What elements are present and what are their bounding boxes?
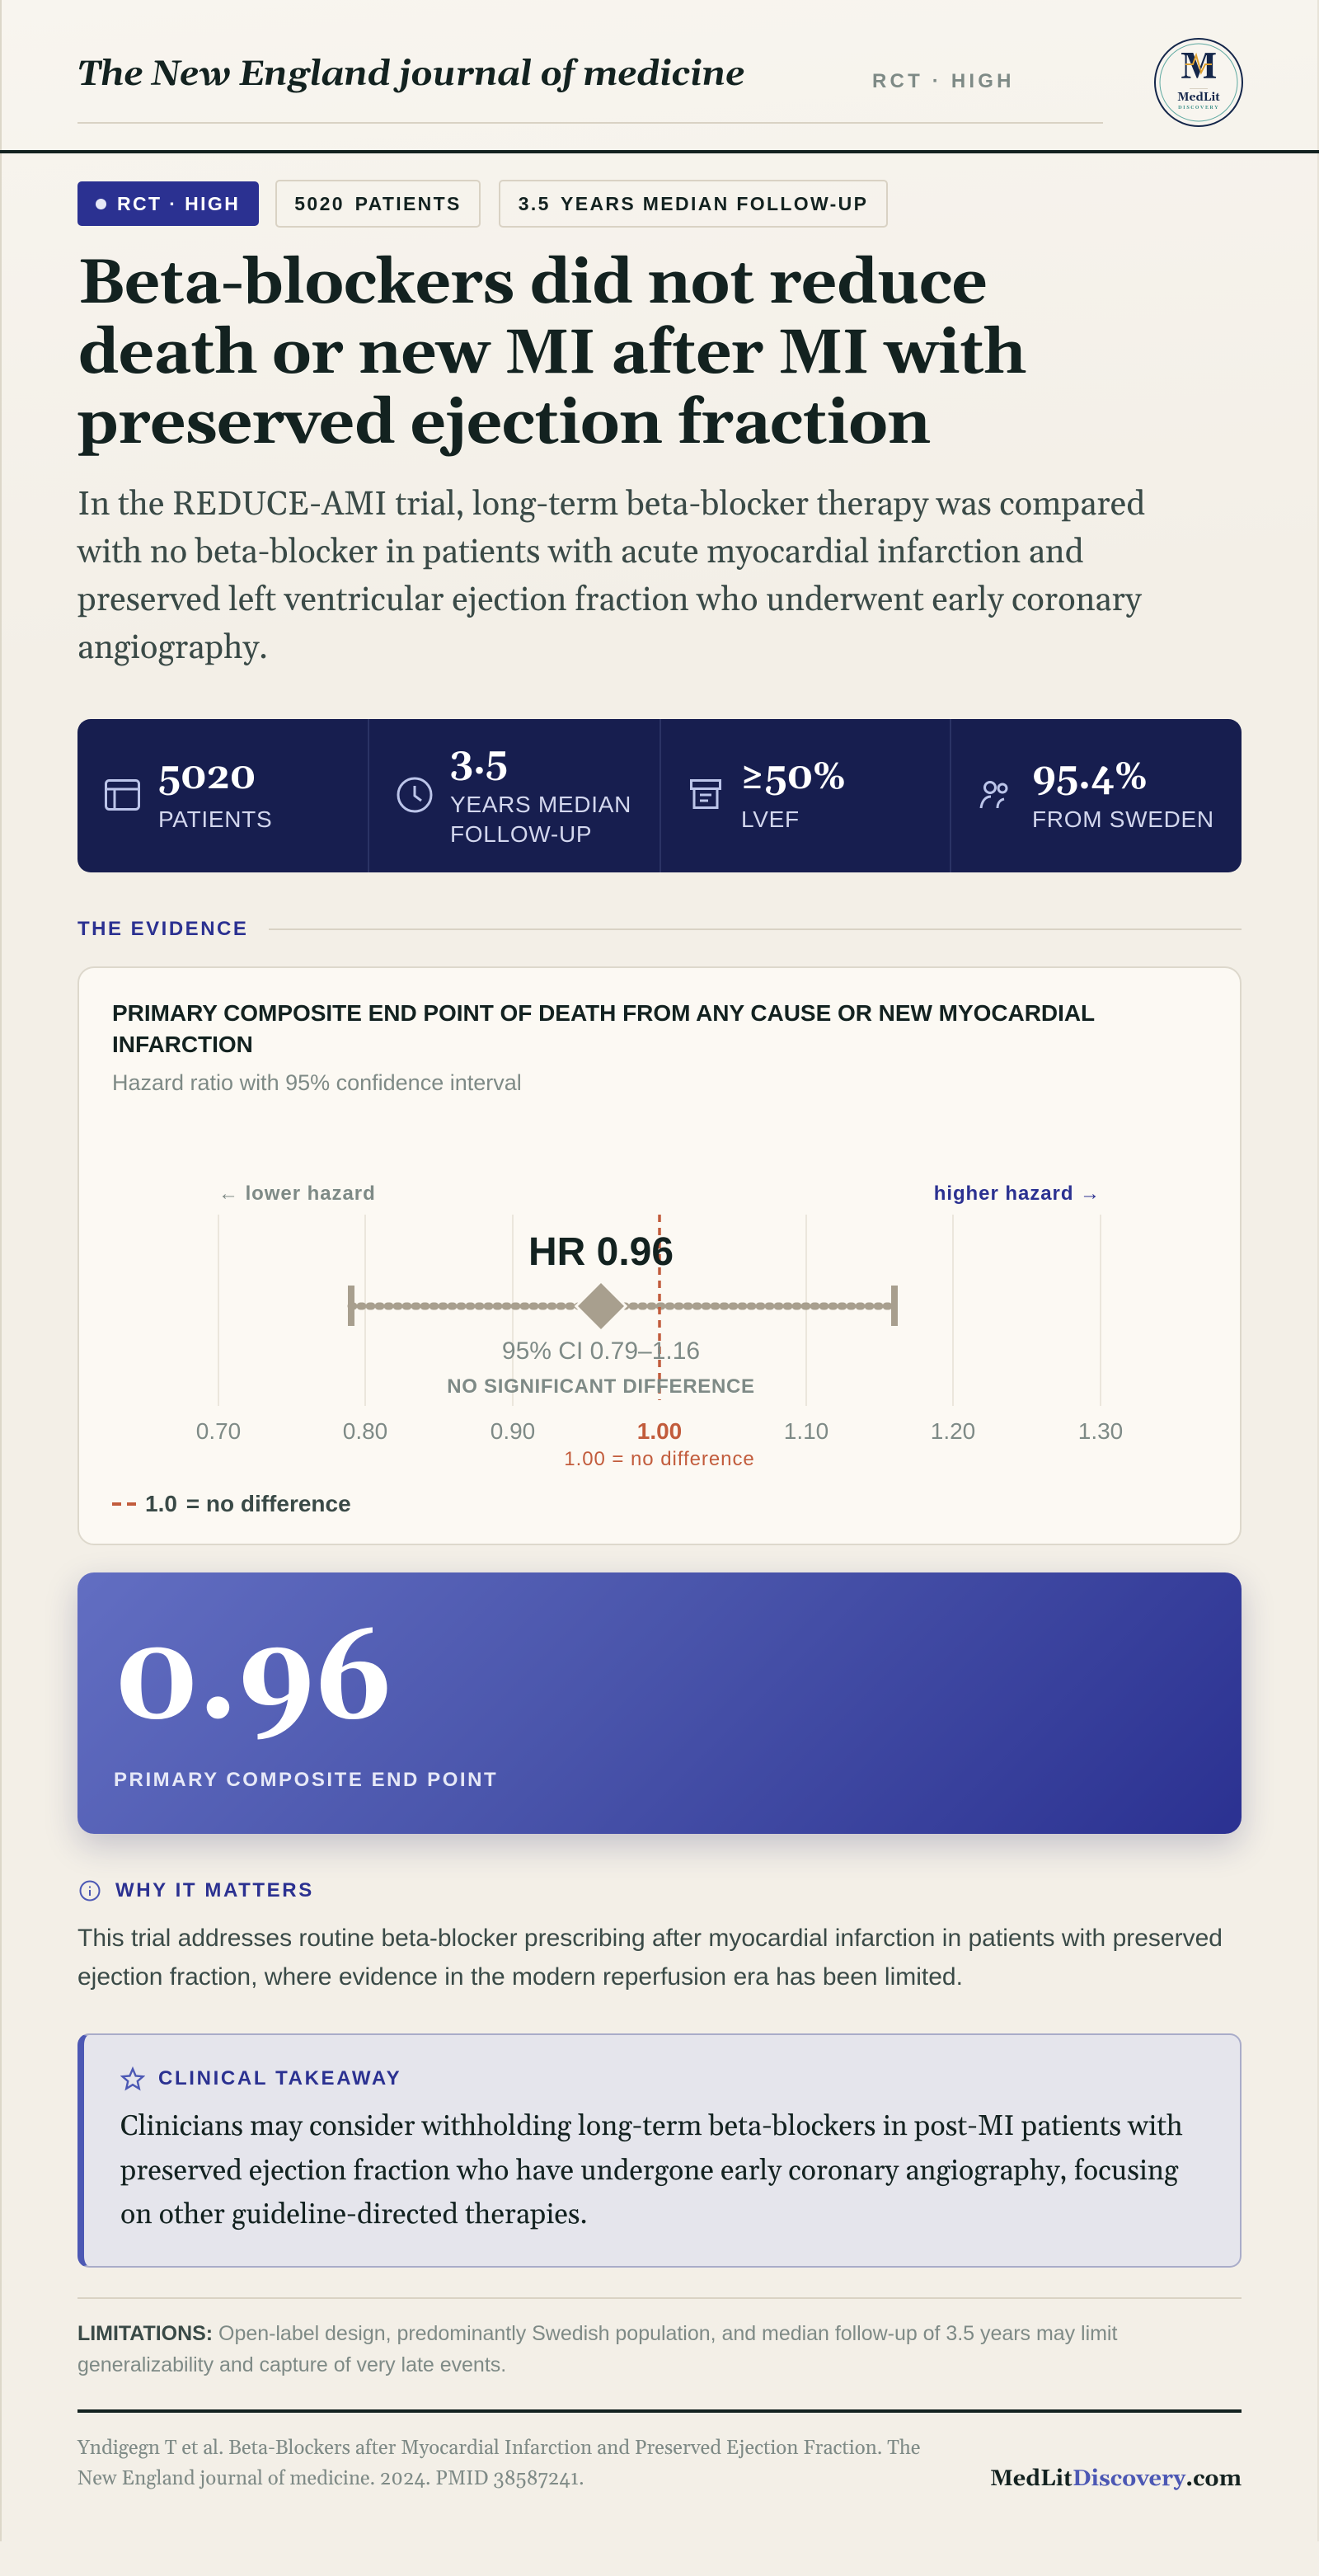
footer rule: [77, 2409, 1242, 2413]
panel: primary result card: [77, 1572, 1242, 1834]
stat: Sweden: [979, 754, 1214, 832]
limitations: LIMITATIONS: Open-label design, predominantly Swedish population, and median follow-up of 3.5 years may limit: [77, 2322, 1117, 2345]
null line caption: 1.00 = no difference: [564, 1448, 755, 1470]
chart: forest plot: [196, 1182, 1123, 1470]
citation: [77, 2437, 921, 2492]
axis tick labels: 1.00: [637, 1418, 682, 1444]
header study design label: RCT · HIGH: [872, 70, 1015, 92]
subtitle: angiography.: [77, 628, 268, 670]
icon: people: [979, 781, 1007, 808]
direction labels: higher hazard →: [934, 1182, 1101, 1205]
takeaway text: preserved ejection fraction who have undergone early coronary angiography, focusing: [120, 2152, 1178, 2188]
subtitle: In the REDUCE-AMI trial, long-term beta-blocker therapy was compared: [77, 484, 1145, 526]
headline: Beta-blockers did not reduce: [77, 244, 987, 324]
takeaway text: on other guideline-directed therapies.: [120, 2197, 588, 2233]
journal header: [0, 0, 1319, 153]
value: 95.4%: [1032, 754, 1148, 801]
axis tick labels: 0.90: [491, 1418, 535, 1444]
direction labels: ← lower hazard: [218, 1182, 376, 1205]
limitations: generalizability and capture of very late events.: [77, 2353, 506, 2376]
card subtitle: Hazard ratio with 95% confidence interval: [112, 1070, 522, 1095]
axis tick labels: 0.70: [196, 1418, 241, 1444]
label: FROM SWEDEN: [1032, 806, 1214, 832]
citation: Yndigegn T et al. Beta-Blockers after Myocardial Infarction and Preserved Ejection Fraction. The: [77, 2437, 921, 2461]
section rule: [269, 928, 1242, 930]
icon: table: [105, 779, 140, 811]
axis tick labels: 1.10: [784, 1418, 828, 1444]
section: why it matters: [77, 1879, 1223, 1991]
icon: MedLit Discovery logo: DISCOVERY: [1178, 105, 1219, 110]
chip: follow-up: [499, 180, 888, 228]
headline: death or new MI after MI with: [77, 314, 1026, 394]
value: 3.5: [450, 740, 508, 787]
badge: study design: [77, 181, 259, 226]
panel: key stats: [77, 719, 1242, 872]
point estimate diamond: [578, 1283, 624, 1329]
panel: clinical takeaway: [77, 2033, 1242, 2268]
icon: clock: [397, 777, 432, 813]
subtitle: with no beta-blocker in patients with acute myocardial infarction and: [77, 532, 1083, 574]
headline: [77, 244, 1026, 464]
divider above limitations: [77, 2297, 1242, 2299]
axis tick labels: 0.80: [343, 1418, 387, 1444]
value label: PRIMARY COMPOSITE END POINT: [114, 1769, 498, 1791]
citation: New England journal of medicine. 2024. PMID 38587241.: [77, 2467, 584, 2492]
subtitle: [77, 484, 1145, 670]
icon: clipboard box: [690, 779, 721, 809]
value: ≥50%: [739, 754, 846, 801]
big value: 0.96: [115, 1606, 392, 1759]
badge text: RCT · HIGH: [117, 193, 240, 214]
legend: [112, 1491, 351, 1516]
chip: patients: 5020 PATIENTS: [294, 193, 462, 214]
limitations: [77, 2322, 1118, 2376]
headline: preserved ejection fraction: [77, 384, 930, 464]
legend dashes: [112, 1502, 136, 1506]
badge dot: [96, 199, 106, 209]
section label: THE EVIDENCE: [77, 918, 248, 940]
journal name: The New England journal of medicine: [77, 54, 744, 97]
value: 5020: [158, 754, 256, 801]
icon: info: [79, 1880, 101, 1901]
body text: ejection fraction, where evidence in the modern reperfusion era has been limited.: [77, 1963, 963, 1991]
label: LVEF: [741, 806, 800, 832]
axis tick labels: 1.30: [1078, 1418, 1123, 1444]
chip: follow-up: 3.5 YEARS MEDIAN FOLLOW-UP: [519, 193, 868, 214]
confidence interval: [348, 1286, 898, 1326]
card title: PRIMARY COMPOSITE END POINT OF DEATH FROM ANY CAUSE OR NEW MYOCARDIAL: [112, 1000, 1095, 1026]
label: PATIENTS: [158, 806, 272, 832]
card title: INFARCTION: [112, 1032, 253, 1057]
icon: MedLit Discovery logo: M: [1180, 45, 1218, 92]
hazard ratio value: HR 0.96: [528, 1230, 674, 1274]
panel: forest plot card: [77, 966, 1242, 1545]
icon: MedLit Discovery logo: [1154, 38, 1243, 127]
label: FOLLOW-UP: [450, 821, 592, 847]
null line: [658, 1215, 661, 1400]
axis tick labels: 1.20: [931, 1418, 975, 1444]
icon: star: [120, 2066, 145, 2091]
subtitle: preserved left ventricular ejection fraction who underwent early coronary: [77, 580, 1142, 622]
axis tick labels: [196, 1418, 1123, 1444]
section label: WHY IT MATTERS: [115, 1879, 314, 1901]
stat: patients: [77, 719, 369, 872]
header rule: [77, 122, 1103, 124]
section label: CLINICAL TAKEAWAY: [158, 2067, 401, 2089]
stat: LVEF: [661, 719, 951, 872]
body text: This trial addresses routine beta-blocker prescribing after myocardial infarction in patients with preserved: [77, 1925, 1223, 1952]
confidence interval text: 95% CI 0.79–1.16: [502, 1337, 700, 1365]
chip: patients: [275, 180, 481, 228]
takeaway text: [120, 2108, 1183, 2233]
label: YEARS MEDIAN: [450, 792, 631, 817]
direction labels: [218, 1182, 1101, 1205]
takeaway text: Clinicians may consider withholding long-term beta-blockers in post-MI patients with: [120, 2108, 1183, 2145]
stat: follow-up: [369, 719, 661, 872]
body text: [77, 1925, 1223, 1991]
card title: [112, 1000, 1095, 1057]
significance note: NO SIGNIFICANT DIFFERENCE: [447, 1375, 755, 1398]
brand: MedLitDiscovery.com: [990, 2466, 1242, 2494]
icon: MedLit Discovery logo: MedLit: [1177, 90, 1220, 105]
legend text: 1.0 = no difference: [145, 1491, 351, 1516]
label: [450, 792, 631, 847]
